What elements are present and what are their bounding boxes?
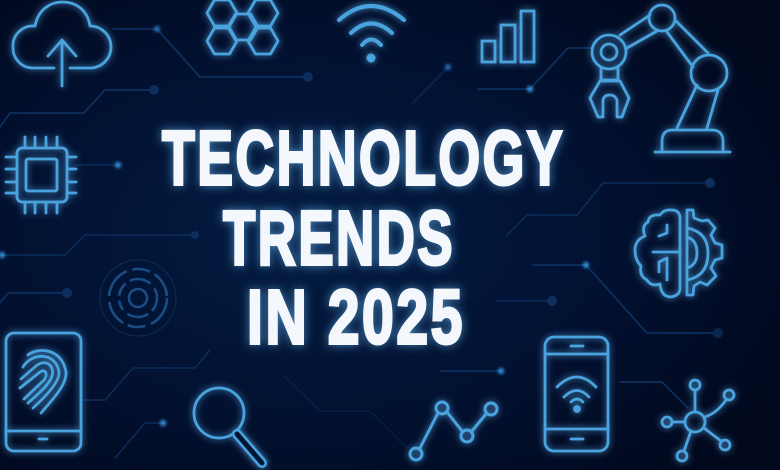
title line 2: TRENDS [223, 196, 455, 282]
icon: concentric fingerprint scanner [100, 260, 176, 336]
icon: microchip [6, 137, 76, 213]
icon: cloud upload [13, 2, 111, 86]
icon: network hub [662, 380, 734, 461]
title line 3: IN 2025 [247, 274, 465, 360]
icon: bar chart [482, 11, 534, 62]
title [162, 116, 565, 360]
icon: robot arm [590, 5, 730, 152]
icon: phone with wifi [545, 337, 608, 451]
icon: wifi [339, 6, 404, 62]
icon: magnifying glass [194, 388, 262, 463]
icon: brain and gear [635, 210, 722, 297]
icon: hexagon cluster [207, 0, 278, 54]
icon: line chart [410, 402, 497, 460]
title line 1: TECHNOLOGY [162, 116, 565, 202]
icon: phone with fingerprint [6, 333, 81, 451]
